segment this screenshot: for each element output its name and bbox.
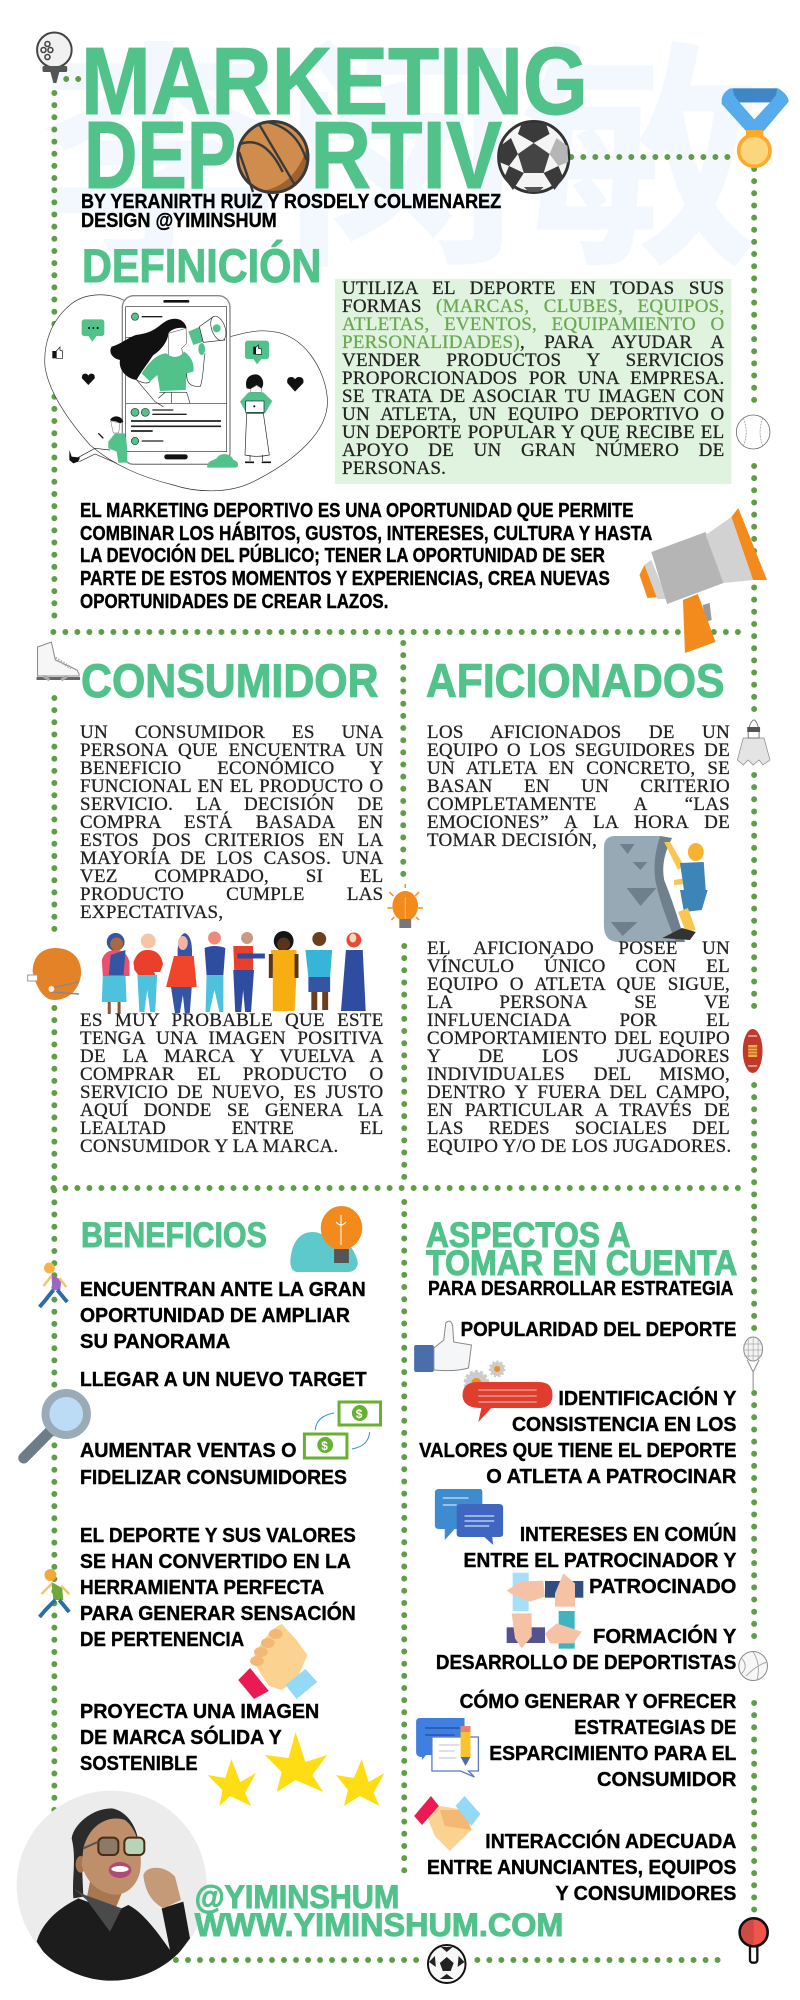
aspects list right: PATROCINADO xyxy=(589,1576,736,1598)
icon: thumbs up xyxy=(414,1321,471,1372)
paragraph: aficionados part 1: BASAN EN UN CRITERIO xyxy=(427,776,730,796)
paragraph: consumidor part 2: CONSUMIDOR Y LA MARCA. xyxy=(80,1136,339,1156)
icon: four linked hands xyxy=(507,1573,583,1649)
benefits list left: PROYECTA UNA IMAGEN xyxy=(80,1701,319,1723)
paragraph: bold statement xyxy=(80,500,653,613)
paragraph: aficionados part 2: EL AFICIONADO POSEE UN xyxy=(427,938,730,958)
byline xyxy=(81,191,501,232)
icon: money cycle: $ xyxy=(356,1407,363,1421)
icon: rugby ball xyxy=(743,1029,763,1073)
paragraph: consumidor part 2: LEALTAD ENTRE EL xyxy=(80,1118,384,1138)
paragraph: aficionados part 2: DENTRO Y FUERA DEL CAMPO, xyxy=(427,1082,730,1102)
icon: chat bubbles xyxy=(435,1489,503,1545)
paragraph: consumidor part 2: TENGA UNA IMAGEN POSITIVA xyxy=(80,1028,384,1048)
paragraph: consumidor part 1: UN CONSUMIDOR ES UNA xyxy=(80,722,384,742)
paragraph: aficionados part 2: LA PERSONA SE VE xyxy=(427,992,730,1012)
paragraph: aficionados part 2: VÍNCULO ÚNICO CON EL xyxy=(427,956,730,976)
contact handle and website: @YIMINSHUM xyxy=(195,1879,399,1915)
paragraph: aficionados part 2: COMPORTAMIENTO DEL EQUIPO xyxy=(427,1028,730,1048)
aspects list right: POPULARIDAD DEL DEPORTE xyxy=(461,1319,736,1341)
paragraph: definition: APOYO DE UN GRAN NÚMERO DE xyxy=(342,440,724,460)
benefits list left: PARA GENERAR SENSACIÓN xyxy=(80,1601,356,1625)
person 4 xyxy=(205,932,225,1012)
paragraph: consumidor part 1 xyxy=(80,722,384,922)
benefits list left: FIDELIZAR CONSUMIDORES xyxy=(80,1467,347,1489)
paragraph: aficionados part 2: INFLUENCIADA POR EL xyxy=(427,1010,730,1030)
icon: money cycle: $ xyxy=(321,1439,328,1453)
benefits list left: HERRAMIENTA PERFECTA xyxy=(80,1577,324,1599)
icon: tennis racket xyxy=(744,1337,763,1390)
icon: documents and pencil xyxy=(416,1718,478,1777)
paragraph: consumidor part 1: ESTOS DOS CRITERIOS EN LA xyxy=(80,830,384,850)
paragraph: definition: UN DEPORTE POPULAR Y QUE RECIBE EL xyxy=(342,422,724,442)
icon: ice skate xyxy=(37,642,80,680)
icon: climber xyxy=(604,836,708,942)
paragraph: consumidor part 1: BENEFICIO ECONÓMICO Y xyxy=(80,758,384,778)
heading: aspectos a tomar en cuenta: TOMAR EN CUENTA xyxy=(426,1245,737,1283)
paragraph: definition: PERSONAS. xyxy=(342,458,446,478)
aspects list right: INTERACCIÓN ADECUADA xyxy=(485,1829,737,1853)
paragraph: consumidor part 1: MAYORÍA DE LOS CASOS. UNA xyxy=(80,848,384,868)
icon: stars xyxy=(208,1732,384,1806)
person 2 xyxy=(133,934,163,1012)
paragraph: bold statement: EL MARKETING DEPORTIVO ES UNA OPORTUNIDAD QUE PERMITE xyxy=(80,500,634,522)
title: DEP xyxy=(84,103,236,209)
benefits list left: SOSTENIBLE xyxy=(80,1753,198,1775)
icon: medal xyxy=(722,88,789,166)
paragraph: definition: FORMAS (MARCAS, CLUBES, EQUIPOS, xyxy=(342,296,724,316)
benefits list left: OPORTUNIDAD DE AMPLIAR xyxy=(80,1305,350,1327)
aspects list right: ENTRE ANUNCIANTES, EQUIPOS xyxy=(427,1857,736,1879)
paragraph: aficionados part 1: COMPLETAMENTE A “LAS xyxy=(427,794,730,814)
icon: runner green xyxy=(40,1569,69,1617)
paragraph: bold statement: OPORTUNIDADES DE CREAR LAZOS. xyxy=(80,591,388,613)
benefits list left: DE PERTENENCIA xyxy=(80,1629,244,1651)
paragraph: consumidor part 1: SERVICIO. LA DECISIÓN DE xyxy=(80,794,384,814)
icon: runner purple xyxy=(40,1262,67,1307)
paragraph: aficionados part 2: EN PARTICULAR A TRAVÉS DE xyxy=(427,1100,730,1120)
paragraph: consumidor part 2: AQUÍ DONDE SE GENERA LA xyxy=(80,1100,384,1120)
person 8 xyxy=(341,932,366,1011)
aspects list right: VALORES QUE TIENE EL DEPORTE xyxy=(419,1440,736,1462)
definition paragraph background xyxy=(335,279,731,484)
icon: ping pong paddle xyxy=(740,1918,768,1963)
paragraph: aficionados part 2: EQUIPO Y/O DE LOS JUGADORES. xyxy=(427,1136,732,1156)
byline: DESIGN @YIMINSHUM xyxy=(81,210,277,232)
paragraph: bold statement: COMBINAR LOS HÁBITOS, GUSTOS, INTERESES, CULTURA Y HASTA xyxy=(80,522,653,545)
paragraph: consumidor part 1: VEZ COMPRADO, SI EL xyxy=(80,866,384,886)
paragraph: aficionados part 1: EQUIPO O LOS SEGUIDORES DE xyxy=(427,740,730,760)
heading: consumidor: CONSUMIDOR xyxy=(81,655,379,707)
aspects list right: Y CONSUMIDORES xyxy=(555,1883,736,1905)
paragraph: aficionados part 2: Y DE LOS JUGADORES xyxy=(427,1046,730,1066)
heading: aspectos a tomar en cuenta: ASPECTOS A xyxy=(426,1217,631,1255)
benefits list left: AUMENTAR VENTAS O xyxy=(80,1440,297,1462)
benefits list left: DE MARCA SÓLIDA Y xyxy=(80,1725,282,1749)
paragraph: consumidor part 2: COMPRAR EL PRODUCTO O xyxy=(80,1064,384,1084)
paragraph: definition: PROPORCIONADOS POR UNA EMPRESA. xyxy=(342,368,724,388)
aspects list right: INTERESES EN COMÚN xyxy=(520,1522,736,1546)
paragraph: bold statement: PARTE DE ESTOS MOMENTOS Y EXPERIENCIAS, CREA NUEVAS xyxy=(80,568,610,590)
person 6 xyxy=(269,931,298,1011)
paragraph: consumidor part 1: PRODUCTO CUMPLE LAS xyxy=(80,884,384,904)
paragraph: aficionados part 1: TOMAR DECISIÓN, xyxy=(427,830,597,850)
paragraph: consumidor part 1: EXPECTATIVAS, xyxy=(80,902,223,922)
paragraph: definition: SE TRATA DE ASOCIAR TU IMAGEN CON xyxy=(342,386,724,406)
aspects list right: ENTRE EL PATROCINADOR Y xyxy=(464,1550,737,1572)
benefits list left: LLEGAR A UN NUEVO TARGET xyxy=(80,1369,367,1391)
paragraph: aficionados part 2: EQUIPO O ATLETA QUE SIGUE, xyxy=(427,974,730,994)
aspects list right: CÓMO GENERAR Y OFRECER xyxy=(460,1689,737,1713)
person 1 xyxy=(102,933,129,1014)
icon: golf ball on tee xyxy=(37,32,72,83)
icon: soccer ball xyxy=(499,122,569,192)
paragraph: definition: ATLETAS, EVENTOS, EQUIPAMIENTO O xyxy=(342,314,724,334)
heading: beneficios: BENEFICIOS xyxy=(81,1217,267,1255)
contact handle and website: WWW.YIMINSHUM.COM xyxy=(195,1907,563,1943)
benefits list left: EL DEPORTE Y SUS VALORES xyxy=(80,1525,356,1547)
aspects list right: IDENTIFICACIÓN Y xyxy=(558,1386,737,1410)
subheading: para desarrollar estrategia: PARA DESARROLLAR ESTRATEGIA xyxy=(428,1278,734,1300)
paragraph: aficionados part 1 xyxy=(427,722,730,850)
paragraph: aficionados part 1: UN ATLETA EN CONCRETO, SE xyxy=(427,758,730,778)
illustration: group of people xyxy=(102,931,366,1014)
person 5 xyxy=(233,932,265,1012)
byline: BY YERANIRTH RUIZ Y ROSDELY COLMENAREZ xyxy=(81,191,501,213)
benefits list left: ENCUENTRAN ANTE LA GRAN xyxy=(80,1279,366,1301)
icon: light bulb xyxy=(387,884,423,928)
paragraph: definition: UTILIZA EL DEPORTE EN TODAS SUS xyxy=(342,278,724,298)
icon: handshake 2 xyxy=(414,1796,480,1851)
icon: baseball xyxy=(736,415,770,449)
aspects list right xyxy=(419,1319,737,1905)
icon: basketball xyxy=(238,122,309,193)
benefits list left: SU PANORAMA xyxy=(80,1331,231,1353)
icon: shuttlecock xyxy=(737,720,770,765)
title: MARKETING xyxy=(81,29,588,135)
person 3 xyxy=(166,933,197,1013)
aspects list right: CONSISTENCIA EN LOS xyxy=(512,1414,736,1436)
aspects list right: CONSUMIDOR xyxy=(597,1769,737,1791)
paragraph: aficionados part 2: LAS REDES SOCIALES DEL xyxy=(427,1118,730,1138)
icon: gears and speech bubble xyxy=(463,1362,553,1422)
paragraph: consumidor part 1: FUNCIONAL EN EL PRODUCTO O xyxy=(80,776,384,796)
person 7 xyxy=(305,932,332,1010)
paragraph: aficionados part 2 xyxy=(427,938,732,1156)
paragraph: definition xyxy=(342,278,724,478)
paragraph: aficionados part 1: LOS AFICIONADOS DE UN xyxy=(427,722,730,742)
title: RTIV xyxy=(310,103,502,209)
illustration: social media influencer xyxy=(45,295,327,491)
aspects list right: DESARROLLO DE DEPORTISTAS xyxy=(436,1652,736,1674)
icon: magnifier xyxy=(24,1393,87,1458)
paragraph: aficionados part 1: EMOCIONES” A LA HORA DE xyxy=(427,812,730,832)
icon: handshake red and blue cuffs xyxy=(238,1624,317,1699)
heading: aspectos a tomar en cuenta xyxy=(426,1217,737,1283)
paragraph: consumidor part 1: PERSONA QUE ENCUENTRA UN xyxy=(80,740,384,760)
heading: aficionados: AFICIONADOS xyxy=(426,655,724,707)
paragraph: definition: VENDER PRODUCTOS Y SERVICIOS xyxy=(342,350,724,370)
paragraph: consumidor part 1: COMPRA ESTÁ BASADA EN xyxy=(80,812,384,832)
aspects list right: O ATLETA A PATROCINAR xyxy=(486,1466,737,1488)
benefits list left: SE HAN CONVERTIDO EN LA xyxy=(80,1551,351,1573)
aspects list right: FORMACIÓN Y xyxy=(593,1624,737,1648)
benefits list left xyxy=(80,1279,367,1775)
icon: soccer ball bottom xyxy=(428,1945,466,1983)
paragraph: consumidor part 2 xyxy=(80,1010,384,1156)
paragraph: consumidor part 2: ES MUY PROBABLE QUE ESTE xyxy=(80,1010,384,1030)
paragraph: bold statement: LA DEVOCIÓN DEL PÚBLICO; TENER LA OPORTUNIDAD DE SER xyxy=(80,543,605,567)
paragraph: aficionados part 2: INDIVIDUALES DEL MISMO, xyxy=(427,1064,730,1084)
icon: volleyball xyxy=(739,1652,767,1680)
paragraph: consumidor part 2: SERVICIO DE NUEVO, ES JUSTO xyxy=(80,1082,384,1102)
icon: bulb and cloud xyxy=(290,1206,362,1272)
paragraph: consumidor part 2: DE LA MARCA Y VUELVA A xyxy=(80,1046,384,1066)
icon: american football helmet xyxy=(28,948,81,1000)
infographic canvas: 李闵敏 xyxy=(40,28,761,296)
icon: megaphone xyxy=(639,508,767,653)
icon: money cycle xyxy=(304,1402,381,1458)
paragraph: definition: PERSONALIDADES), PARA AYUDAR A xyxy=(342,332,724,352)
aspects list right: ESPARCIMIENTO PARA EL xyxy=(489,1743,736,1765)
aspects list right: ESTRATEGIAS DE xyxy=(574,1717,736,1739)
portrait of the author xyxy=(17,1791,207,1985)
paragraph: definition: UN ATLETA, UN EQUIPO DEPORTIVO O xyxy=(342,404,724,424)
title xyxy=(81,29,588,209)
heading: definición: DEFINICIÓN xyxy=(82,240,321,292)
contact handle and website xyxy=(195,1879,563,1943)
